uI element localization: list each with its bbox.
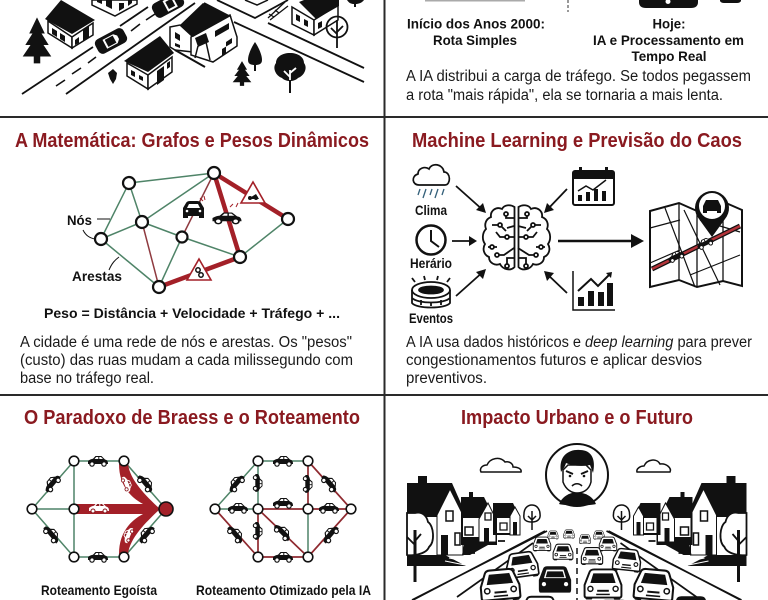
red flow arrow [74,464,160,554]
text block: preventivos. [406,370,487,387]
phone base [639,0,698,8]
tree: tall [248,42,262,71]
formula: Peso = Distância + Velocidade + Tráfego + ... [44,305,340,321]
houses right [606,476,746,600]
phone button [666,0,670,4]
panel: city map illustration [22,0,364,94]
car front icon [183,201,204,218]
label: early 2000s: Início dos Anos 2000: [407,16,545,32]
tree: pine [233,61,251,86]
tree: top [347,0,364,7]
text block [406,334,752,387]
tree [407,513,433,555]
graph nodes [95,167,294,293]
tree: round [274,53,306,93]
roads [22,0,364,94]
heading: A Matemática: Grafos e Pesos Dinâmicos [15,130,369,152]
car: left [93,26,129,56]
text block: congestionamentos futuros e aplicar desvios [406,352,702,369]
panel: evolution of routes [406,0,751,104]
label: early 2000s: Rota Simples [433,32,517,48]
label: today [593,16,744,64]
label: early 2000s [407,16,545,48]
icon: stadium [412,276,450,308]
warning sign: accident [241,182,265,203]
car side icon [212,212,242,224]
house: right [292,0,339,35]
label: today: IA e Processamento em [593,32,744,48]
arrow: to map [558,234,644,248]
caption: optimized: Roteamento Otimizado pela IA [196,582,371,598]
heading: Machine Learning e Previsão do Caos [412,130,742,152]
graph edges [101,173,288,287]
label: today: Hoje: [652,16,686,32]
label: weather: Clima [415,202,447,218]
text block: A cidade é uma rede de nós e arestas. Os "pesos" [20,334,352,351]
tree: outline [326,16,348,48]
input arrows [452,186,567,296]
label: nodes [67,212,110,239]
icon: bar chart [573,271,615,310]
steam marks [200,196,238,207]
tree: pine left [23,17,51,63]
diagram: selfish routing [27,456,173,562]
label: today: Tempo Real [632,48,706,64]
panel: urban impact [407,407,746,600]
icon: map [650,203,742,287]
heading: O Paradoxo de Braess e o Roteamento [24,407,360,429]
icon: brain [483,205,550,269]
house: large centre [170,3,237,67]
text block: a rota "mais rápida", ela se tornaria a mais lenta. [406,87,723,104]
dashed separator [567,0,569,12]
label: events: Eventos [409,310,453,326]
traffic cars [448,530,711,600]
nodes selfish [27,456,173,562]
panel: Braess paradox [24,407,371,598]
cloud right [637,460,670,472]
cars on selfish graph [42,456,156,562]
house: top right corner [245,0,268,5]
icon: clock [416,226,446,254]
text block: A IA distribui a carga de tráfego. Se todos pegassem [406,68,751,85]
second device [720,0,741,3]
tree: small bush [108,69,117,84]
cloud left [480,458,521,472]
text block: base no tráfego real. [20,370,154,387]
panel: math graphs [15,130,369,387]
icon: cloud rain [413,165,449,198]
house: top [92,0,137,16]
caption: selfish: Roteamento Egoísta [41,582,157,598]
cars on optimized graph [226,456,340,562]
kerb lines [412,531,547,600]
label: time: Herário [410,255,452,271]
text block: A IA usa dados históricos e deep learning para prever [406,334,752,351]
heading: Impacto Urbano e o Futuro [461,407,693,429]
diagram: optimized routing [210,456,356,562]
text block [20,334,353,387]
houses left [407,476,547,600]
car: top [150,0,186,20]
label: nodes: Nós [67,212,92,228]
house: lower [124,36,174,89]
road centre dashes [576,548,578,600]
text block [406,68,751,104]
house: left [45,0,95,48]
warning sign: traffic [187,259,211,280]
icon: angry driver [546,444,608,506]
label: edges [72,257,122,284]
icon: calendar chart [573,167,614,205]
panel: machine learning [406,130,752,387]
old route map remainder [425,0,525,2]
arrow heads [469,203,554,281]
icon: map pin [695,191,729,237]
label: edges: Arestas [72,268,122,284]
nodes optimized [210,456,356,562]
boat-like parked car [268,2,288,20]
text block: (custo) das ruas mudam a cada milissegundo com [20,352,353,369]
